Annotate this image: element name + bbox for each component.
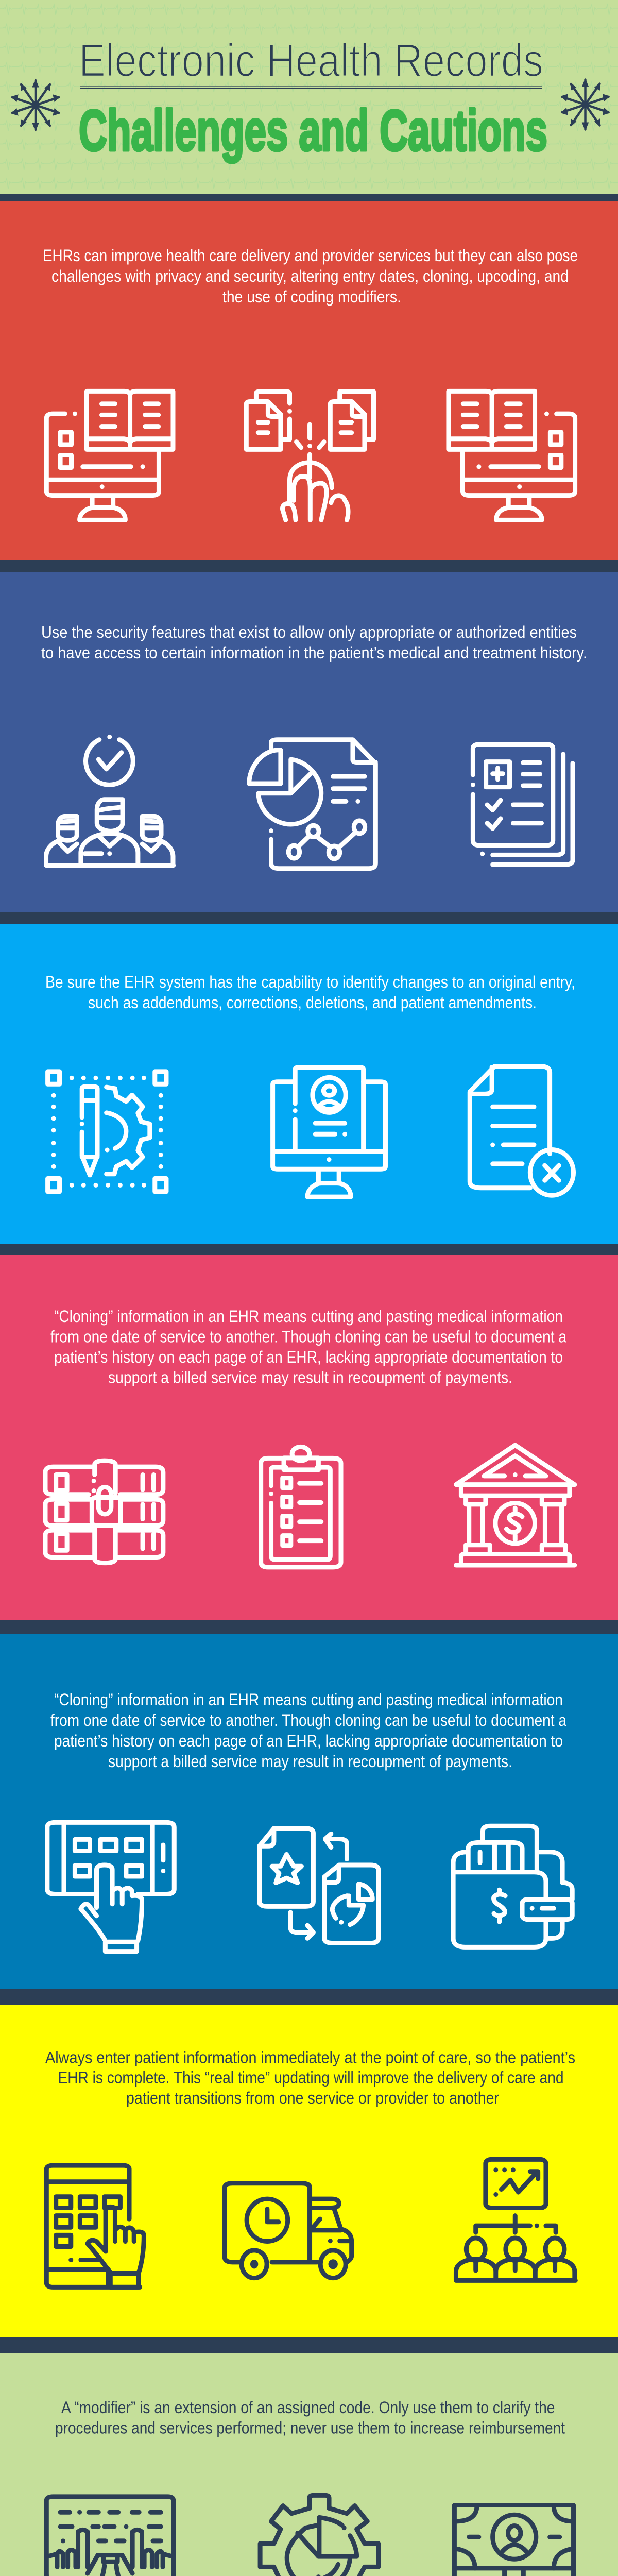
icon: team with check mark — [46, 737, 174, 865]
title: Electronic Health Records: Electronic Health Records — [79, 35, 543, 87]
icon: document with delete mark — [470, 1066, 574, 1195]
panel: cloning (pink) — [0, 1255, 618, 1620]
icon: clipboard checklist — [261, 1447, 341, 1567]
text block: cloning: patient’s history on each page of an EHR, lacking appropriate documentation to — [54, 1348, 563, 1366]
text block: modifiers — [55, 2398, 565, 2437]
text block: real-time entry: patient transitions from one service or provider to another — [126, 2089, 499, 2107]
icon: team presentation chart — [456, 2159, 575, 2280]
panel: header — [0, 0, 618, 194]
icon: strapped server files — [45, 1461, 163, 1563]
text block: security features — [41, 623, 587, 662]
text block: EHR challenges: the use of coding modifiers. — [222, 287, 401, 306]
panel: real-time entry (yellow) — [0, 2005, 618, 2337]
icon: right snowflake arrows — [561, 79, 610, 130]
icon: mirrored monitor with open book — [449, 391, 575, 520]
text block: real-time entry: Always enter patient information immediately at the point of care, so the patient’s — [45, 2048, 575, 2067]
panel: modifiers (green) — [0, 2353, 618, 2576]
icon: stacked medical records — [473, 744, 573, 865]
icon: report with pie and line chart — [249, 740, 375, 869]
text block: cloning repeat: patient’s history on each page of an EHR, lacking appropriate documentation to — [54, 1732, 563, 1750]
icon: monitor with open book — [46, 391, 173, 520]
icon: hand tapping tablet — [47, 1822, 174, 1952]
text block: cloning: “Cloning” information in an EHR means cutting and pasting medical information — [54, 1307, 563, 1326]
panel: security features (blue) — [0, 572, 618, 912]
text block: cloning — [50, 1307, 566, 1387]
text block: real-time entry: EHR is complete. This “real time” updating will improve the delivery of care and — [58, 2068, 563, 2087]
text block: change tracking: such as addendums, corrections, deletions, and patient amendments. — [88, 993, 537, 1012]
icon: gear with pie chart — [260, 2495, 379, 2576]
icon: tap duplicating documents — [246, 392, 374, 520]
text block: cloning repeat: “Cloning” information in an EHR means cutting and pasting medical information — [54, 1690, 563, 1709]
icon: hands typing on keyboard — [46, 2497, 174, 2576]
icon: delivery truck with clock — [225, 2183, 352, 2278]
text block: real-time entry — [45, 2048, 575, 2107]
text block: cloning repeat — [50, 1690, 566, 1771]
title rule — [80, 86, 542, 89]
text block: change tracking — [45, 973, 575, 1012]
icon: bank with dollar coin — [456, 1445, 575, 1565]
text block: EHR challenges — [43, 246, 578, 306]
text block: cloning: support a billed service may result in recoupment of payments. — [108, 1368, 512, 1387]
icon: hand tapping tablet app — [46, 2165, 144, 2287]
panel: cloning repeat (dark blue) — [0, 1634, 618, 1989]
icon: left snowflake arrows — [11, 79, 60, 131]
icon: monitor with patient profile — [273, 1067, 385, 1197]
text block: security features: Use the security features that exist to allow only appropriate or authorized entities — [41, 623, 577, 641]
icon: exchanging documents — [260, 1828, 379, 1943]
text block: cloning repeat: support a billed service may result in recoupment of payments. — [108, 1752, 512, 1771]
icon: wallet with cards and dollar — [453, 1826, 572, 1947]
panel: change tracking (light blue) — [0, 924, 618, 1244]
icon: banknote with portrait — [454, 2505, 574, 2576]
panel: EHR challenges (red) — [0, 201, 618, 560]
text block: modifiers: A “modifier” is an extension of an assigned code. Only use them to clarify the — [61, 2398, 555, 2417]
icon: pencil and gear in selection frame — [48, 1072, 166, 1192]
